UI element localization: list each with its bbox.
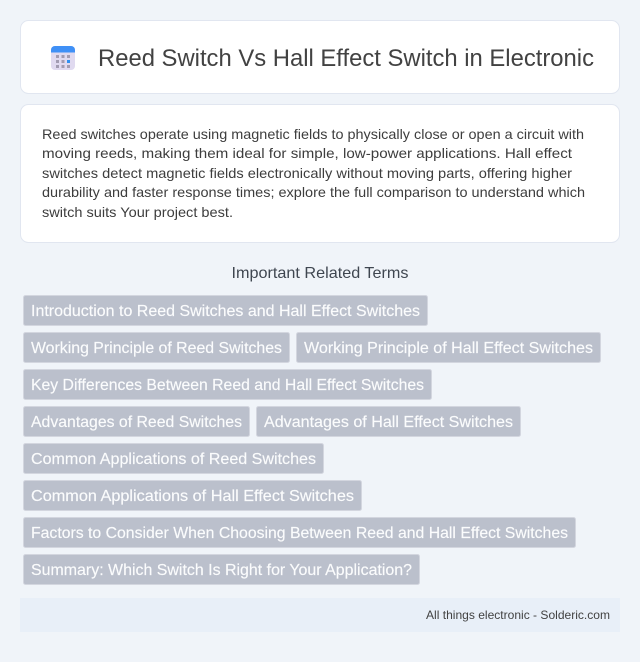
description text: switch suits Your project best. bbox=[42, 204, 233, 220]
footer text: All things electronic - Solderic.com bbox=[426, 608, 610, 622]
header panel bbox=[20, 20, 620, 94]
tag: summary bbox=[24, 554, 420, 584]
tag: applications hall: Common Applications of Hall Effect Switches bbox=[31, 488, 354, 505]
tag: working principle reed: Working Principle of Reed Switches bbox=[31, 340, 282, 357]
icon: calendar grid bbox=[51, 46, 75, 70]
panel: description bbox=[20, 104, 620, 242]
tag: working principle hall bbox=[296, 332, 600, 362]
description text: switches detect magnetic fields electronically without moving parts, offering higher bbox=[42, 165, 572, 181]
tag: applications reed bbox=[24, 444, 324, 474]
tag list bbox=[24, 296, 600, 584]
heading: important related terms: Important Related Terms bbox=[232, 265, 408, 282]
tag: factors bbox=[24, 518, 576, 548]
tag: working principle hall: Working Principle of Hall Effect Switches bbox=[304, 340, 593, 357]
tag: key differences bbox=[24, 370, 432, 400]
tag: summary: Summary: Which Switch Is Right for Your Application? bbox=[31, 562, 412, 579]
tag: working principle reed bbox=[24, 332, 290, 362]
tag: introduction bbox=[24, 296, 428, 326]
tag: advantages reed: Advantages of Reed Switches bbox=[31, 414, 242, 431]
description text: moving reeds, making them ideal for simple, low-power applications. Hall effect bbox=[42, 145, 572, 161]
tag: key differences: Key Differences Between Reed and Hall Effect Switches bbox=[31, 377, 424, 394]
tag: advantages hall bbox=[256, 406, 520, 436]
description text bbox=[42, 126, 585, 220]
footer bar bbox=[20, 598, 620, 632]
title: Reed Switch Vs Hall Effect Switch in Electronic bbox=[98, 45, 594, 72]
tag: factors: Factors to Consider When Choosing Between Reed and Hall Effect Switches bbox=[31, 525, 568, 542]
tag: applications hall bbox=[24, 480, 362, 510]
tag: advantages reed bbox=[24, 406, 250, 436]
tag: advantages hall: Advantages of Hall Effect Switches bbox=[264, 414, 513, 431]
description text: Reed switches operate using magnetic fields to physically close or open a circuit with bbox=[42, 126, 584, 142]
description text: durability and faster response times; explore the full comparison to understand which bbox=[42, 184, 585, 200]
tag: introduction: Introduction to Reed Switches and Hall Effect Switches bbox=[31, 303, 420, 320]
tag: applications reed: Common Applications of Reed Switches bbox=[31, 451, 316, 468]
